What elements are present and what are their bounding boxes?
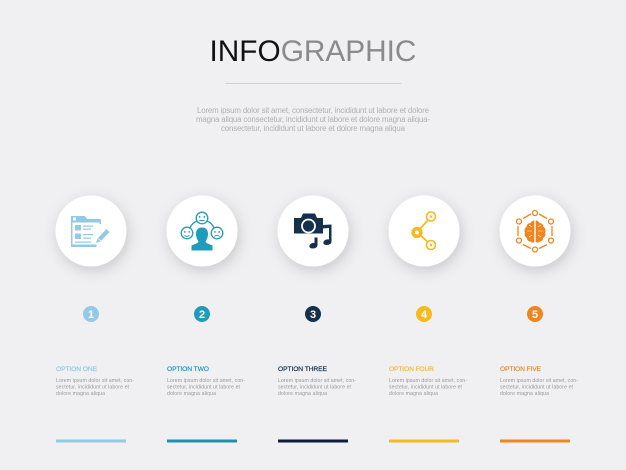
intro text: consectetur, incididunt ut labore et dolore magna aliqua <box>221 124 406 133</box>
option one text <box>56 366 134 397</box>
icon circle: camera and music notes <box>278 196 348 266</box>
number badge 2 <box>194 306 210 322</box>
intro text: magna aliqua consectetur, incididunt ut labore et dolore magna aliqua- <box>196 115 430 124</box>
panel: option four <box>388 196 467 442</box>
number badge 4 <box>416 306 432 322</box>
intro text <box>196 106 430 133</box>
option three text <box>278 366 356 397</box>
option two text: OPTION TWO <box>167 366 209 373</box>
panel: option one <box>56 196 134 442</box>
panel: option two <box>166 196 245 442</box>
option one text: Lorem ipsum dolor sit amet, con- <box>56 378 134 384</box>
icon circle: brain network <box>500 196 570 266</box>
number badge 5: 5 <box>532 309 538 321</box>
option one text: dolore magna aliqua <box>56 391 105 397</box>
option five text <box>500 366 578 397</box>
option five text: sectetur, incididunt ut labore et <box>500 384 574 390</box>
option three text: sectetur, incididunt ut labore et <box>278 384 352 390</box>
option four text: Lorem ipsum dolor sit amet, con- <box>389 378 467 384</box>
option five text: dolore magna aliqua <box>500 391 549 397</box>
option two text: dolore magna aliqua <box>167 391 216 397</box>
icon circle: person with three faces <box>166 196 238 266</box>
number badge 1: 1 <box>88 309 94 321</box>
number badge 3 <box>305 306 321 322</box>
option three text: dolore magna aliqua <box>278 391 327 397</box>
option one text: OPTION ONE <box>56 366 98 373</box>
panel: option three <box>278 196 356 442</box>
option four text <box>389 366 467 397</box>
panel: option five <box>500 196 578 442</box>
option four text: OPTION FOUR <box>389 366 434 373</box>
option three text: OPTION THREE <box>278 366 328 373</box>
number badge 2: 2 <box>199 309 205 321</box>
option five text: Lorem ipsum dolor sit amet, con- <box>500 378 578 384</box>
option two text <box>167 366 245 397</box>
option four text: sectetur, incididunt ut labore et <box>389 384 463 390</box>
option two text: Lorem ipsum dolor sit amet, con- <box>167 378 245 384</box>
title: INFOGRAPHIC <box>210 35 416 68</box>
option five text: OPTION FIVE <box>500 366 542 373</box>
number badge 5 <box>527 306 543 322</box>
option one text: sectetur, incididunt ut labore et <box>56 384 130 390</box>
number badge 3: 3 <box>310 309 316 321</box>
number badge 4: 4 <box>421 309 428 321</box>
icon circle: form and pencil <box>56 196 126 266</box>
number badge 1 <box>83 306 99 322</box>
option two text: sectetur, incididunt ut labore et <box>167 384 241 390</box>
icon circle: share nodes <box>388 196 460 266</box>
intro text: Lorem ipsum dolor sit amet, consectetur, incididunt ut labore et dolore <box>197 106 430 115</box>
option three text: Lorem ipsum dolor sit amet, con- <box>278 378 356 384</box>
option four text: dolore magna aliqua <box>389 391 438 397</box>
